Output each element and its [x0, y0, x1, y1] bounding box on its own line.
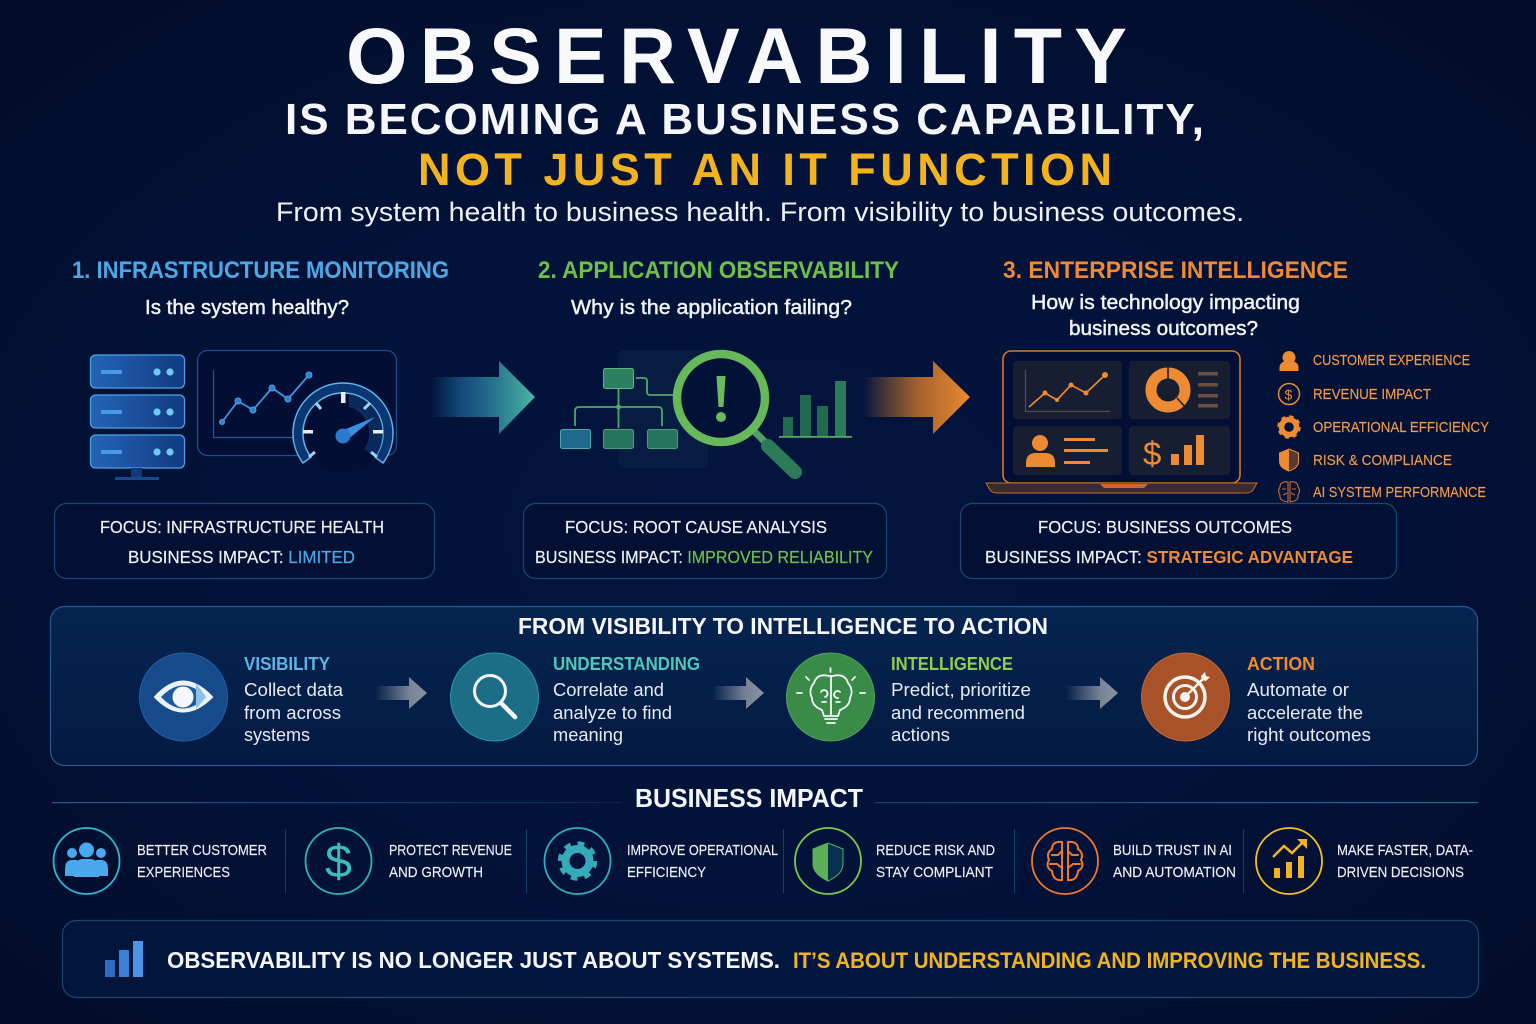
- impact: customer experiences: BETTER CUSTOMER: [137, 842, 267, 859]
- arrow: visibility to understanding: [375, 677, 427, 709]
- focus box 2: [524, 504, 886, 578]
- arrow: understanding to intelligence: [712, 677, 764, 709]
- focus box 1: FOCUS: INFRASTRUCTURE HEALTH: [100, 517, 384, 537]
- title: observability: OBSERVABILITY: [346, 11, 1127, 100]
- step: intelligence: INTELLIGENCE: [891, 654, 1013, 674]
- focus box 1: [54, 504, 434, 578]
- icon: server stack: [90, 355, 184, 480]
- focus box 2: FOCUS: ROOT CAUSE ANALYSIS: [565, 517, 827, 537]
- chart: green bars: [779, 381, 852, 438]
- impact: operational efficiency: EFFICIENCY: [627, 864, 706, 881]
- step: action: ACTION: [1247, 654, 1315, 674]
- icon: revenue: $: [1284, 386, 1292, 402]
- step: understanding: [450, 653, 700, 745]
- question 1: Is the system healthy?: [145, 297, 349, 319]
- step: visibility: VISIBILITY: [244, 654, 330, 674]
- step: visibility: Collect data: [244, 680, 344, 700]
- column 3: enterprise intelligence: [960, 257, 1489, 578]
- step: visibility: systems: [244, 725, 310, 745]
- impact: trust in AI: [1032, 828, 1236, 894]
- banner text: white: OBSERVABILITY IS NO LONGER JUST ABOUT SYSTEMS.: [167, 947, 780, 973]
- impact: revenue: PROTECT REVENUE: [389, 842, 512, 859]
- subtitle line: business capability: IS BECOMING A BUSINESS CAPABILITY,: [285, 95, 1204, 144]
- label: operational efficiency: OPERATIONAL EFFICIENCY: [1313, 420, 1489, 436]
- step: action: right outcomes: [1247, 725, 1371, 745]
- step: intelligence: Predict, prioritize: [891, 680, 1031, 700]
- chart: monitor line chart: [198, 350, 396, 456]
- step: intelligence: [786, 653, 1031, 745]
- step: action: [1142, 653, 1371, 745]
- arrow: monitoring to application: [430, 361, 535, 434]
- question 2: Why is the application failing?: [571, 297, 852, 319]
- column 3: enterprise intelligence: business outcomes?: [1069, 318, 1258, 340]
- step: visibility: from across: [244, 703, 341, 723]
- column 1: infrastructure monitoring: [54, 257, 449, 578]
- icon: brain: [1278, 482, 1300, 502]
- impact: revenue: [306, 828, 512, 894]
- impact: trust in AI: BUILD TRUST IN AI: [1113, 842, 1232, 859]
- impact: revenue: AND GROWTH: [389, 864, 483, 881]
- focus box 2: BUSINESS IMPACT: IMPROVED RELIABILITY: [535, 547, 873, 567]
- title block: [276, 11, 1244, 227]
- impact: risk and compliance: STAY COMPLIANT: [876, 864, 993, 881]
- question 3: How is technology impacting: [1031, 292, 1300, 314]
- icon: gear: [1279, 417, 1299, 437]
- focus box 1: BUSINESS IMPACT: LIMITED: [128, 547, 355, 567]
- heading 3: 3. ENTERPRISE INTELLIGENCE: [1003, 257, 1348, 284]
- icon: bar chart: [105, 941, 143, 977]
- arrow: intelligence to action: [1066, 677, 1118, 709]
- focus box 3: BUSINESS IMPACT: STRATEGIC ADVANTAGE: [985, 547, 1353, 567]
- label: revenue impact: REVENUE IMPACT: [1313, 387, 1431, 403]
- icon: shield: [1280, 449, 1298, 471]
- step: intelligence: actions: [891, 725, 950, 745]
- panel: from visibility to intelligence to action: [50, 606, 1478, 766]
- impact: risk and compliance: [795, 828, 995, 894]
- step: action: accelerate the: [1247, 703, 1363, 723]
- list: outcome areas: [1278, 351, 1489, 502]
- impact: faster decisions: MAKE FASTER, DATA-: [1337, 842, 1473, 859]
- section heading: BUSINESS IMPACT: [635, 783, 863, 813]
- panel heading: FROM VISIBILITY TO INTELLIGENCE TO ACTION: [518, 613, 1048, 639]
- subtitle line: not just an IT function: NOT JUST AN IT FUNCTION: [418, 144, 1112, 195]
- tagline: From system health to business health. From visibility to business outcomes.: [276, 197, 1244, 227]
- step: visibility: [140, 653, 344, 745]
- impact: operational efficiency: [544, 828, 778, 894]
- impact: risk and compliance: REDUCE RISK AND: [876, 842, 995, 859]
- icon: speedometer: [293, 383, 393, 473]
- icon: revenue: [1278, 384, 1300, 404]
- label: AI system performance: AI SYSTEM PERFORMANCE: [1313, 485, 1486, 501]
- column 2: application observability: [524, 257, 899, 578]
- impact: operational efficiency: IMPROVE OPERATIONAL: [627, 842, 778, 859]
- impact: trust in AI: AND AUTOMATION: [1113, 864, 1236, 881]
- icon: magnifying glass with alert: [677, 354, 795, 472]
- arrow: application to enterprise: [863, 361, 970, 434]
- heading 2: 2. APPLICATION OBSERVABILITY: [538, 257, 899, 284]
- impact: faster decisions: [1256, 828, 1473, 894]
- step: intelligence: and recommend: [891, 703, 1025, 723]
- step: understanding: meaning: [553, 725, 623, 745]
- impact: revenue: $: [325, 835, 352, 887]
- step: understanding: Correlate and: [553, 680, 664, 700]
- impact: customer experiences: EXPERIENCES: [137, 864, 230, 881]
- banner: conclusion: [62, 920, 1478, 998]
- label: customer experience: CUSTOMER EXPERIENCE: [1313, 353, 1470, 369]
- icon: laptop dashboard: [986, 351, 1257, 493]
- heading 1: 1. INFRASTRUCTURE MONITORING: [72, 257, 449, 284]
- label: risk and compliance: RISK & COMPLIANCE: [1313, 453, 1452, 469]
- focus box 3: [960, 504, 1396, 578]
- banner text: yellow: IT’S ABOUT UNDERSTANDING AND IMPROVING THE BUSINESS.: [793, 948, 1426, 973]
- icon: customer: [1280, 351, 1298, 371]
- icon: laptop dashboard: $: [1143, 435, 1161, 472]
- impact: customer experiences: [54, 828, 267, 894]
- step: action: Automate or: [1247, 680, 1349, 700]
- impact: faster decisions: DRIVEN DECISIONS: [1337, 864, 1464, 881]
- icon: hierarchy diagram: [560, 350, 708, 468]
- section: business impact: [52, 783, 1478, 894]
- step: understanding: UNDERSTANDING: [553, 654, 700, 674]
- step: understanding: analyze to find: [553, 703, 672, 723]
- focus box 3: FOCUS: BUSINESS OUTCOMES: [1038, 517, 1292, 537]
